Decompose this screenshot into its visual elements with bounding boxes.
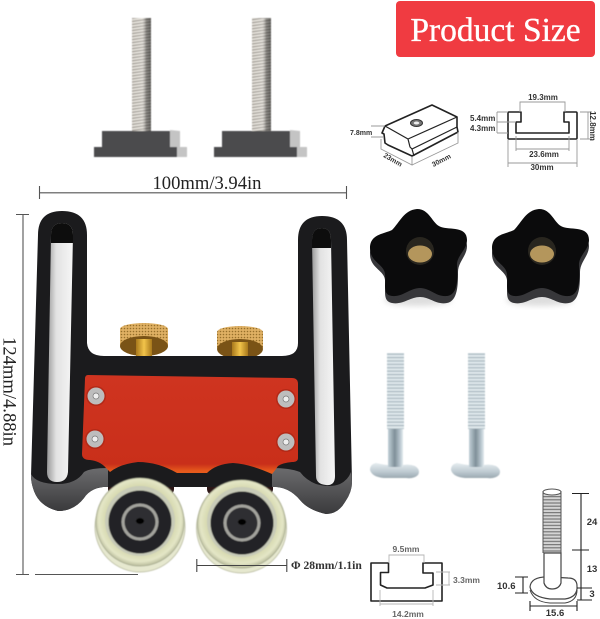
width dimension: 100mm bbox=[40, 173, 346, 199]
brass thumb screw, right bbox=[217, 326, 263, 359]
wheel axle blocks bbox=[108, 465, 273, 495]
plate screws bbox=[85, 386, 296, 452]
T-track profile dimension sketch bbox=[470, 93, 597, 172]
small T-track dimension sketch: 3.3mm bbox=[453, 575, 480, 585]
small T-track dimension sketch: 9.5mm bbox=[393, 544, 420, 554]
aluminium frame bbox=[31, 211, 352, 514]
T-bolt dimension sketch bbox=[497, 489, 598, 619]
small T-track dimension sketch: 14.2mm bbox=[392, 609, 424, 619]
T-slot bolt, top left bbox=[94, 18, 187, 157]
T-nut dimension sketch: 30mm bbox=[431, 153, 452, 169]
brass thumb screw, left bbox=[120, 323, 168, 357]
wheel, right bbox=[196, 480, 286, 573]
product size badge: Product Size bbox=[410, 12, 581, 49]
T-bolt dimension sketch: 10.6 bbox=[497, 581, 516, 592]
T-track profile dimension sketch: 19.3mm bbox=[528, 93, 558, 102]
right slot bbox=[312, 228, 335, 485]
height dimension: 124mm bbox=[0, 214, 138, 574]
star knob, right bbox=[492, 209, 589, 306]
wheel, left bbox=[95, 478, 185, 572]
T-track profile dimension sketch: 5.4mm bbox=[470, 114, 495, 123]
T-bolt dimension sketch: 3 bbox=[589, 589, 595, 600]
product size badge bbox=[396, 1, 595, 57]
T-slot bolt, top right bbox=[214, 18, 307, 157]
T-track profile dimension sketch: 4.3mm bbox=[470, 124, 495, 133]
T-track profile dimension sketch: 23.6mm bbox=[529, 150, 559, 159]
T-bolt dimension sketch: 24 bbox=[587, 517, 598, 528]
zinc T-bolt, right bbox=[451, 353, 500, 478]
T-bolt dimension sketch: 13 bbox=[587, 564, 597, 575]
wheel diameter dimension bbox=[197, 559, 362, 572]
left slot bbox=[47, 223, 73, 482]
T-nut dimension sketch: 23mm bbox=[382, 152, 403, 169]
T-nut dimension sketch bbox=[350, 105, 458, 169]
T-track profile dimension sketch: 12.8mm bbox=[588, 111, 597, 141]
T-bolt dimension sketch: 15.6 bbox=[546, 608, 564, 619]
T-track profile dimension sketch: 30mm bbox=[530, 163, 554, 172]
zinc T-bolt, left bbox=[370, 353, 419, 478]
width dimension: 100mm: 100mm/3.94in bbox=[153, 173, 262, 194]
T-nut dimension sketch: 7.8mm bbox=[350, 130, 372, 137]
small T-track dimension sketch bbox=[371, 544, 480, 619]
red plate bbox=[82, 375, 298, 474]
wheel diameter dimension: Φ 28mm/1.1in bbox=[291, 559, 362, 572]
star knob, left bbox=[370, 209, 467, 306]
